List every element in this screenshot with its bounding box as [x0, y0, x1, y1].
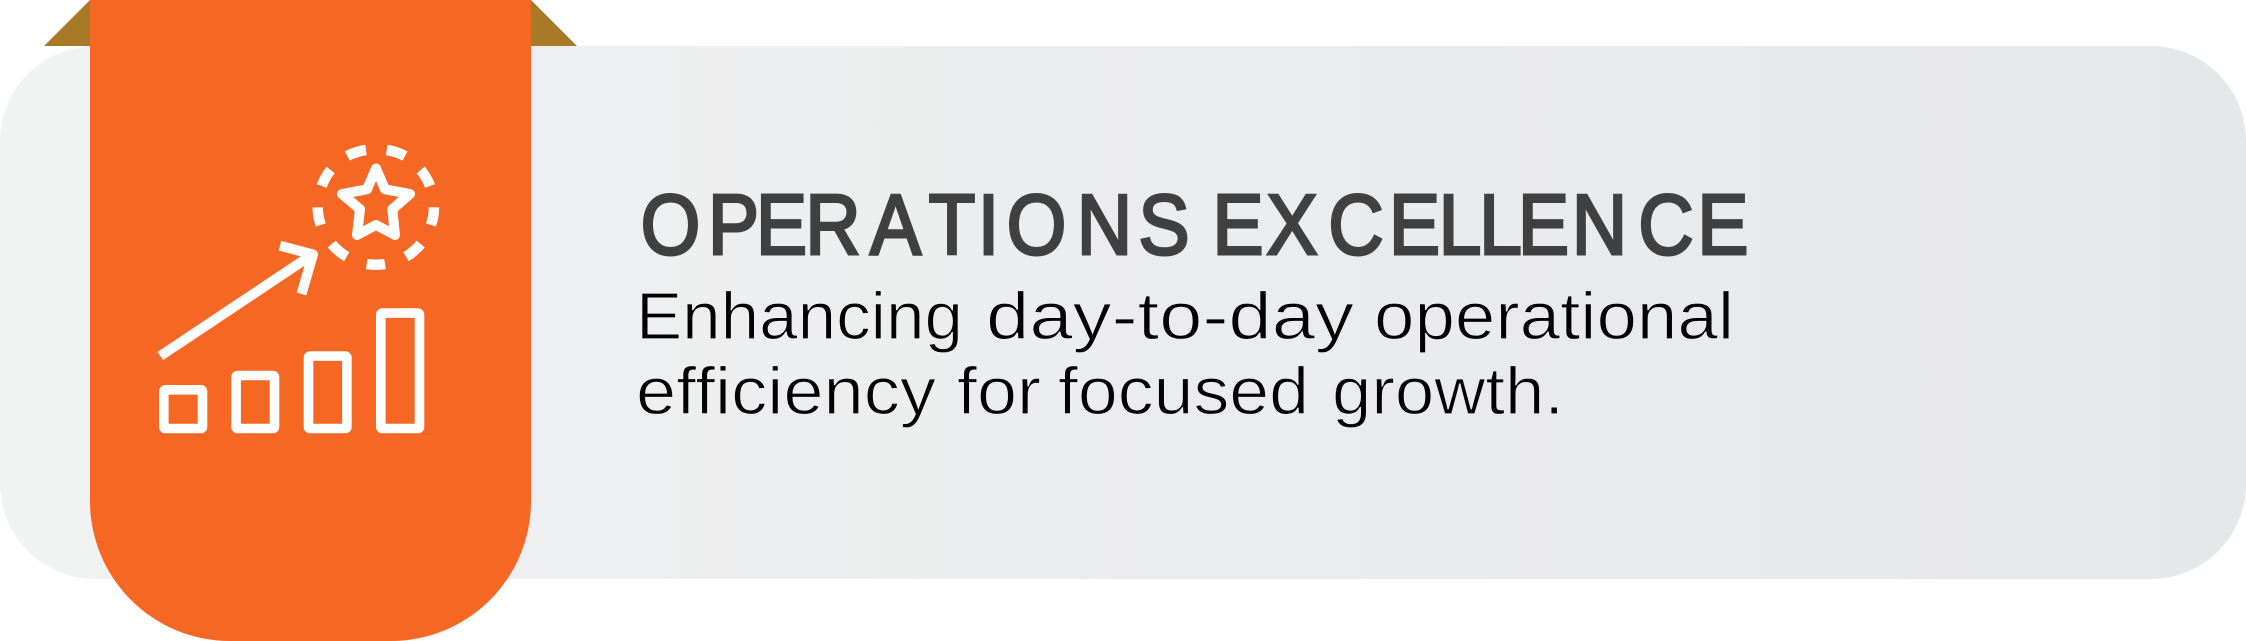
- description line 2: focused: [1058, 354, 1309, 429]
- description line 1: [636, 279, 1734, 354]
- text block: description: [636, 279, 1734, 429]
- description line 1: operational: [1374, 279, 1734, 354]
- heading: [641, 178, 1748, 273]
- icon: bar chart: [164, 313, 420, 428]
- description line 2: efficiency: [636, 354, 937, 429]
- heading word 2: EXCELLENCE: [1213, 178, 1748, 273]
- description line 1: Enhancing: [636, 279, 963, 354]
- icon: rising arrow: [160, 246, 313, 356]
- description line 1: day-to-day: [986, 279, 1355, 354]
- description line 2: growth.: [1332, 354, 1564, 429]
- heading word 1: OPERATIONS: [641, 178, 1189, 273]
- description line 2: [636, 354, 1564, 429]
- ribbon fold: right gold triangle: [531, 0, 577, 46]
- panel: orange ribbon: [90, 0, 531, 641]
- description line 2: for: [957, 354, 1041, 429]
- icon: dashed circle around star: [318, 150, 434, 265]
- icon: star: [342, 168, 410, 235]
- icon: growth chart with arrow and star: [160, 150, 434, 428]
- ribbon fold: left gold triangle: [44, 0, 90, 46]
